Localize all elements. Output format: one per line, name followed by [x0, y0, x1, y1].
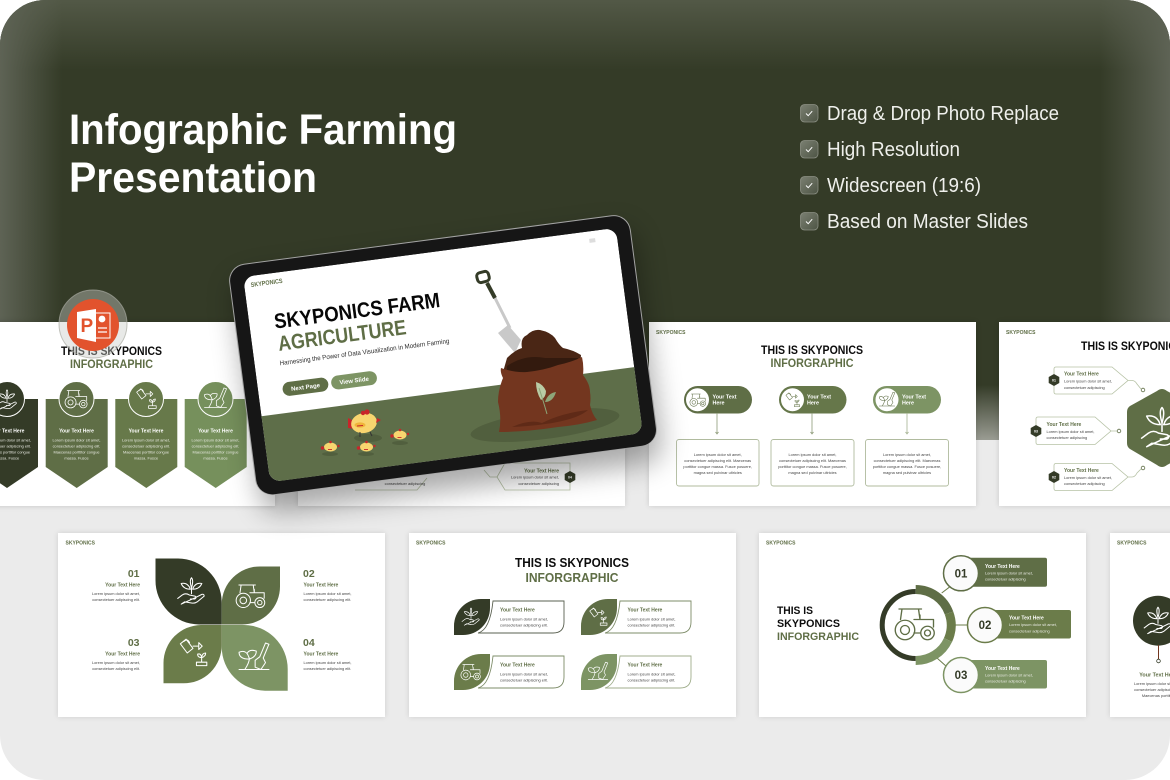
callout 02: Your Text Here [1064, 468, 1099, 474]
slide: leaf cards: THIS IS SKYPONICS [515, 555, 629, 570]
pill column 3: porttitor congue massa. Fusce posuere, [873, 464, 941, 469]
big hexagon with hand icon [1127, 389, 1170, 467]
label 03: Lorem ipsum dolor sit amet, [92, 660, 140, 665]
slide: pentagon columns: THIS IS SKYPONICS [61, 346, 162, 358]
pill column 1: porttitor congue massa. Fusce posuere, [683, 464, 752, 469]
leaf card 4: consectetuer adipiscing elit. [628, 678, 675, 682]
tablet screen [243, 228, 643, 486]
leaf card 2: consectetuer adipiscing elit. [628, 622, 675, 628]
label 01: Your Text Here [105, 582, 140, 588]
column: shovel: consectetuer adipiscing elit. [192, 444, 239, 448]
pill column 1: consectetuer adipiscing elit. Maecenas [684, 458, 751, 463]
pill column 1: Lorem ipsum dolor sit amet, [694, 452, 742, 457]
slide: circle timeline [1110, 533, 1170, 717]
slide: hexagon callouts [999, 322, 1170, 506]
column: watering: Your Text Here [129, 428, 164, 434]
button: next page: Next Page [291, 383, 321, 393]
column: plant [0, 382, 38, 488]
callout 01: Lorem ipsum dolor sit amet, [1064, 379, 1112, 384]
slide: leaf cards: INFORGRAPHIC [526, 570, 619, 585]
leaf card 1: Your Text Here [500, 608, 535, 614]
pill column 2: consectetuer adipiscing elit. Maecenas [779, 458, 846, 463]
shovel [476, 271, 521, 353]
pill column 3: magna sed pulvinar ultricies [883, 470, 931, 475]
label 03: Your Text Here [105, 652, 140, 658]
bar 01: 01 [955, 568, 968, 580]
slide: hexagon hidden behind tablet: Your Text Here [524, 468, 559, 474]
pill column 2 [771, 386, 854, 486]
bar 03: consectetuer adipiscing [985, 678, 1026, 684]
column: shovel: Your Text Here [198, 428, 233, 434]
column: tractor: consectetuer adipiscing elit. [53, 444, 100, 448]
label 02: Your Text Here [304, 582, 339, 588]
callout 03: consectetuer adipiscing [1046, 435, 1087, 440]
label 04: Lorem ipsum dolor sit amet, [304, 660, 352, 665]
tablet screen: Harnessing the Power of Data Visualization in Modern Farming [279, 338, 450, 367]
label 02: consectetuer adipiscing elit. [304, 597, 351, 602]
button: view slide: View Slide [339, 377, 370, 387]
callout 01: Your Text Here [1064, 372, 1099, 378]
slide: three pills: SKYPONICS [656, 330, 686, 336]
tablet mockup [227, 213, 659, 497]
column: watering [115, 382, 177, 488]
icon: powerpoint badge [59, 290, 127, 358]
label 01 [92, 568, 140, 602]
slide: three pills: THIS IS SKYPONICS [761, 345, 863, 357]
pill column 1: magna sed pulvinar ultricies [694, 470, 742, 475]
column: tractor: massa. Fusce [64, 456, 89, 460]
pill column 1 [676, 386, 759, 486]
leaf card 4: Your Text Here [628, 662, 663, 668]
tablet screen: AGRICULTURE [277, 316, 408, 356]
column: tractor: Your Text Here [59, 428, 94, 434]
item: drag and drop: Drag & Drop Photo Replace [827, 103, 1059, 125]
leaf card 3: Your Text Here [500, 662, 535, 668]
callout 02: Lorem ipsum dolor sit amet, [1064, 475, 1112, 480]
leaf card 4 [581, 654, 691, 690]
big chicken [348, 409, 381, 437]
petal 03 [164, 625, 222, 683]
heading: SKYPONICS [777, 618, 840, 630]
item: master slides: Based on Master Slides [827, 211, 1028, 233]
leaf card 1: Lorem ipsum dolor sit amet, [500, 616, 548, 622]
slide: hexagon hidden behind tablet: consectetuer adipiscing [385, 481, 425, 486]
callout 03: 03 [1034, 430, 1038, 434]
label 02: Lorem ipsum dolor sit amet, [304, 591, 352, 596]
slide: leaf cards [409, 533, 736, 717]
icon: powerpoint badge: P [80, 316, 94, 337]
leaf card 3: consectetuer adipiscing elit. [500, 678, 548, 682]
label 04 [303, 637, 352, 671]
headline: Presentation [69, 154, 317, 202]
callout 03: Your Text Here [1046, 422, 1082, 428]
column: tractor: Lorem ipsum dolor sit amet, [52, 438, 101, 442]
pill column 2: Lorem ipsum dolor sit amet, [788, 452, 837, 457]
slide: hexagon hidden behind tablet [296, 448, 627, 508]
dark header band [0, 0, 1170, 440]
bar 02 [968, 608, 1071, 642]
pill column 1: Your Text [712, 394, 737, 400]
slide: hexagon hidden behind tablet: Lorem ipsum dolor sit amet, [511, 474, 559, 480]
petal 02 [222, 566, 280, 625]
label 01: Lorem ipsum dolor sit amet, [92, 591, 140, 596]
tablet screen: SKYPONICS FARM [273, 289, 441, 334]
button: next page [282, 377, 329, 397]
connector lines [937, 587, 968, 667]
column: tractor: Maecenas porttitor congue [53, 450, 100, 454]
bar 02: 02 [979, 620, 991, 632]
slide: four petals: SKYPONICS [66, 540, 96, 546]
column: shovel [185, 382, 247, 488]
slide: three pills: INFORGRAPHIC [770, 358, 854, 370]
callout 01 [1049, 367, 1145, 394]
pill column 3: Here [902, 401, 914, 407]
label 04: 04 [303, 637, 315, 649]
leaf card 2: Lorem ipsum dolor sit amet, [628, 616, 676, 622]
slide: leaf cards: SKYPONICS [416, 540, 446, 546]
slide: four petals [58, 533, 385, 717]
heading: THIS IS [777, 605, 813, 617]
soil sack [498, 330, 597, 432]
icon: sprout [536, 382, 556, 414]
heading [777, 606, 859, 640]
leaf card 1 [454, 599, 564, 635]
pill column 2: porttitor congue massa. Fusce posuere, [778, 464, 847, 469]
label 02: 02 [303, 568, 315, 580]
label 03: 03 [128, 637, 140, 649]
headline: Infographic Farming [69, 106, 457, 154]
chick right [390, 429, 409, 440]
tablet screen: SKYPONICS [250, 278, 283, 289]
illustration: shovel and soil sack [469, 271, 621, 449]
slide: circle timeline: SKYPONICS [1117, 540, 1147, 546]
callout 01: consectetuer adipiscing [1064, 385, 1105, 390]
feature checklist [800, 103, 1059, 233]
slide: three pills [649, 322, 976, 506]
callout 02 [1049, 464, 1145, 490]
callout 03: Lorem ipsum dolor sit amet, [1046, 429, 1095, 434]
bar 03: 03 [955, 670, 967, 682]
column: shovel: Maecenas porttitor congue [192, 450, 239, 454]
bar 02: Lorem ipsum dolor sit amet, [1009, 622, 1057, 627]
slide: pentagon columns: INFORGRAPHIC [70, 359, 153, 371]
label 02 [303, 568, 352, 602]
item: widescreen: Widescreen (19:6) [827, 175, 981, 197]
bar 02: consectetuer adipiscing [1009, 628, 1050, 634]
pill column 3: consectetuer adipiscing elit. Maecenas [874, 458, 940, 463]
tablet shadow [232, 227, 663, 514]
slide: hexagon hidden behind tablet: 04 [568, 476, 572, 480]
slide: hexagon callouts: SKYPONICS [1006, 330, 1036, 336]
label 01: 01 [128, 568, 140, 580]
leaf card 3 [454, 654, 564, 690]
callout 02: consectetuer adipiscing [1064, 481, 1105, 486]
label 04: consectetuer adipiscing elit. [304, 666, 351, 671]
leaf card 2 [581, 599, 691, 635]
bar 03: Your Text Here [985, 666, 1020, 672]
leaf card 3: Lorem ipsum dolor sit amet, [500, 672, 548, 676]
column: watering: Lorem ipsum dolor sit amet, [122, 438, 170, 442]
headline [72, 113, 454, 192]
column: shovel: Lorem ipsum dolor sit amet, [191, 438, 240, 442]
illustration: chickens [321, 409, 409, 456]
column: watering: consectetuer adipiscing elit. [122, 444, 170, 448]
pill column 1: Here [712, 401, 724, 407]
pill column 3: Lorem ipsum dolor sit amet, [883, 452, 931, 457]
bar 03 [944, 658, 1047, 692]
slide: pentagon columns [0, 322, 275, 506]
leaf card 4: Lorem ipsum dolor sit amet, [628, 672, 676, 676]
column: tractor [46, 382, 108, 488]
leaf card 2: Your Text Here [628, 608, 663, 614]
column: shovel: massa. Fusce [203, 456, 228, 460]
bar 01: Your Text Here [985, 564, 1020, 570]
bar 02: Your Text Here [1009, 616, 1044, 622]
heading: INFORGRAPHIC [777, 631, 859, 643]
chick middle [357, 441, 376, 452]
callout 01: 01 [1052, 378, 1056, 382]
button: view slide [330, 370, 378, 390]
ring chart [882, 590, 951, 661]
pill column 3 [866, 386, 948, 486]
petal 04 [222, 625, 288, 691]
label 03 [92, 637, 140, 671]
pill column 2: magna sed pulvinar ultricies [788, 470, 837, 475]
chick left [321, 441, 340, 452]
pill column 2: Your Text [807, 394, 831, 400]
bar 01: consectetuer adipiscing [985, 576, 1026, 582]
item: high resolution: High Resolution [827, 139, 960, 161]
column: watering: Maecenas porttitor congue [123, 450, 169, 454]
label 01: consectetuer adipiscing elit. [92, 597, 140, 602]
pill column 2: Here [807, 401, 819, 407]
slide: hexagon hidden behind tablet: consectetuer adipiscing [518, 481, 559, 486]
petal 01 [155, 558, 222, 624]
callout 03 [1031, 417, 1121, 444]
leaf card 1: consectetuer adipiscing elit. [500, 622, 548, 628]
bar 01 [944, 556, 1047, 591]
slide: ring with three bars: SKYPONICS [766, 540, 796, 546]
callout 02: 02 [1052, 476, 1056, 480]
column: watering: massa. Fusce [134, 456, 158, 460]
label 03: consectetuer adipiscing elit. [92, 666, 140, 671]
bar 01: Lorem ipsum dolor sit amet, [985, 570, 1033, 575]
pill column 3: Your Text [902, 394, 926, 400]
bar 03: Lorem ipsum dolor sit amet, [985, 672, 1033, 677]
slide: ring with three bars [759, 533, 1086, 717]
label 04: Your Text Here [304, 652, 339, 658]
